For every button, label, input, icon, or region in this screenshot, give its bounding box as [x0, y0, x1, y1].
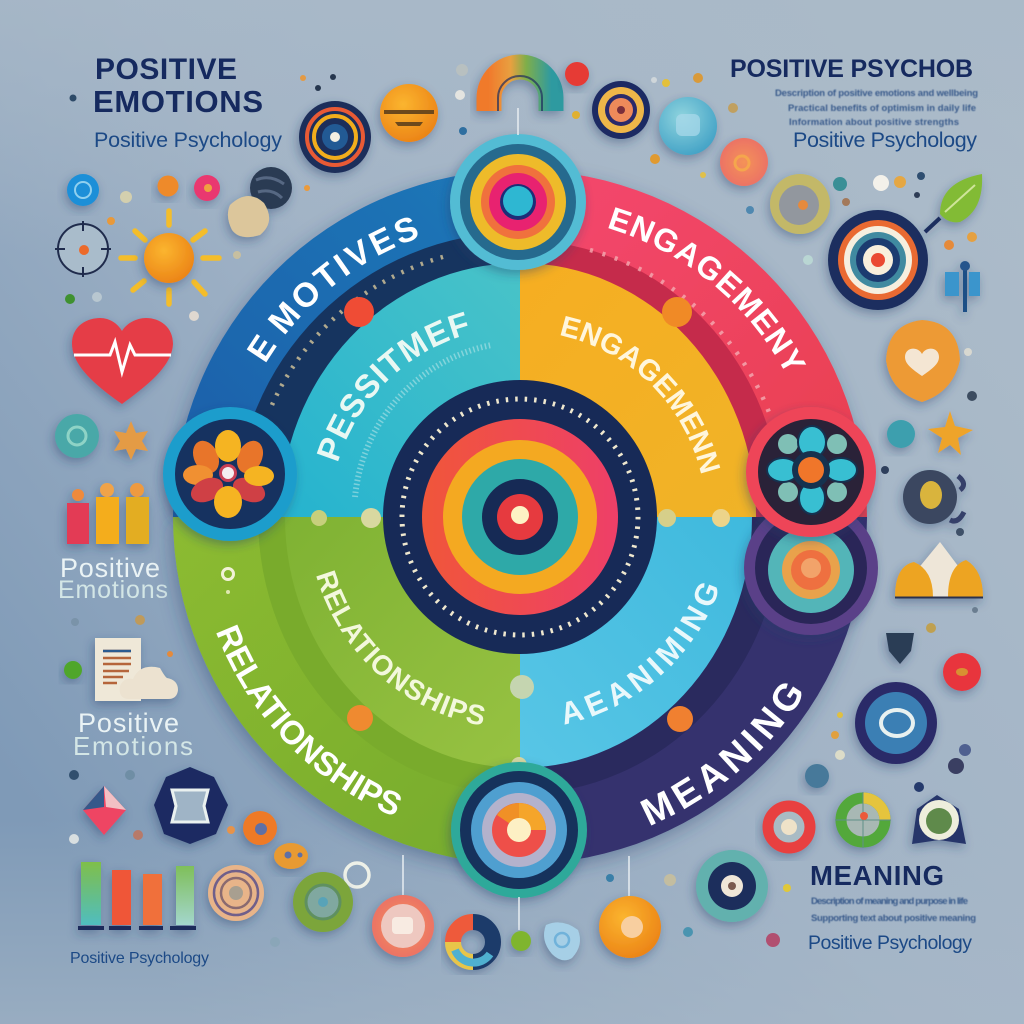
node: engagement flower: [746, 407, 876, 537]
label: positive emotions upper: Positive: [60, 553, 160, 583]
icon: orange blob: [274, 843, 308, 869]
label: positive emotions lower: [73, 708, 193, 761]
panel: relationships quadrant: [285, 517, 520, 768]
icon: heart: [72, 318, 173, 404]
icon: red rounded: [943, 653, 981, 691]
icon: navy blue disc: [855, 682, 937, 764]
label: positive emotions upper: [58, 553, 168, 604]
panel: emotives outer ring: [173, 170, 520, 517]
icon: dark ring: [903, 470, 964, 524]
main wheel: [140, 172, 908, 890]
icon: red ball: [372, 895, 434, 957]
text: pessitmef: PESSITMEF: [316, 312, 468, 462]
heading: meaning: [808, 860, 976, 954]
icon: pie ring: [453, 922, 493, 963]
tick arc under pessitmef: [355, 345, 492, 497]
icon: rainbow: [489, 67, 551, 111]
icon: red segmented ring: [768, 806, 810, 848]
heading: positive psychology: [730, 55, 978, 152]
heading: positive psychology: Description of positive emotions and wellbeing: [775, 88, 978, 99]
icon: orange dot: [158, 176, 178, 196]
panel: meaning outer ring: [520, 517, 867, 864]
panel: meaning quadrant: [520, 517, 752, 768]
icon: orange ball bottom: [599, 896, 661, 958]
icon: white ring: [345, 863, 369, 887]
dotted arc on dark band: [272, 255, 450, 405]
icon: diamond: [83, 786, 126, 835]
icon: green dot: [511, 931, 531, 951]
dotted arc on red band: [590, 250, 770, 415]
label: positive emotions lower: Emotions: [73, 731, 193, 761]
icon: steel dot: [805, 764, 829, 788]
connector lines: [403, 108, 629, 930]
icon: leaf: [925, 174, 982, 232]
heading: positive psychology: Information about positive strengths: [789, 117, 959, 128]
panel: relationships outer ring: [173, 517, 520, 864]
label: positive psychology lower left: Positive Psychology: [70, 950, 209, 967]
icon: document with cloud: [95, 638, 178, 701]
icon: gold star: [928, 411, 973, 455]
icon: small shield: [886, 633, 914, 664]
label: positive emotions upper: Emotions: [58, 576, 168, 604]
node: emotions flower: [163, 407, 297, 541]
icon: teal target: [696, 850, 768, 922]
icon: pink dot: [194, 175, 220, 201]
heading: positive psychology: POSITIVE PSYCHOB: [730, 55, 973, 83]
heading: positive emotions: Positive Psychology: [94, 128, 282, 152]
icon: mountains and house: [895, 542, 983, 598]
icon: teal chip: [887, 420, 915, 448]
small scattered details: [65, 64, 978, 947]
dark band: meaning: [520, 517, 782, 794]
heading: positive emotions: EMOTIONS: [93, 84, 263, 119]
text: engagemenn: ENGAGEMENN: [560, 316, 720, 474]
heading: positive emotions: POSITIVE: [95, 53, 237, 86]
text: engagement: ENGAGEMENY: [608, 207, 806, 369]
heading: positive psychology: Practical benefits of optimism in daily life: [788, 103, 976, 114]
central target: [383, 380, 657, 654]
icon: coral ball: [720, 138, 768, 186]
icon: light blue shield: [544, 922, 580, 960]
heading: meaning: MEANING: [810, 860, 944, 891]
node: purple right: [744, 501, 878, 635]
icon: blue figure: [945, 261, 980, 312]
icon: large target: [828, 210, 928, 310]
text: meaning: MEANING: [640, 683, 802, 826]
icon: beige rock: [228, 196, 269, 237]
icon: orange heart badge: [886, 320, 960, 402]
dark band: emotives: [235, 232, 520, 517]
icon: dark star target: [912, 795, 966, 844]
label: positive emotions lower: Positive: [78, 708, 179, 738]
bar chart: [78, 862, 196, 928]
icon: green blob: [64, 661, 82, 679]
icon: dark blob: [250, 167, 292, 209]
heading: meaning: Description of meaning and purpose in life: [811, 896, 968, 907]
icon: teal ball: [659, 97, 717, 155]
dark band: relationships: [258, 517, 520, 794]
icon: orange cluster: [114, 421, 148, 460]
text: relationships inner: RELATIONSHIPS: [316, 570, 484, 724]
text: aeaniming: AEANIMING: [564, 583, 718, 725]
node: top rainbow target: [450, 134, 586, 270]
panel: engagement outer ring: [520, 170, 867, 517]
icon: orange ring: [243, 811, 277, 845]
icon: spiral disc: [208, 865, 264, 921]
text: emotives: EMOTIVES: [246, 218, 418, 362]
panel: engagement quadrant: [520, 263, 756, 517]
icon: navy octagon: [154, 767, 228, 844]
heading: meaning: Supporting text about positive meaning: [811, 913, 976, 924]
node dots on wheel: [311, 297, 730, 773]
icon: crosshair: [55, 221, 111, 277]
icon: teal circle: [55, 414, 99, 458]
icon: sun: [121, 211, 219, 304]
icon: top target dark: [299, 101, 371, 173]
icon: green ball: [293, 872, 353, 932]
icon: orange ball: [380, 84, 438, 142]
node: bottom target: [451, 762, 587, 898]
icon: green ring: [835, 792, 891, 848]
icon: blue spiral: [67, 174, 99, 206]
icon: ring ball: [770, 174, 830, 234]
icon: navy target: [592, 81, 650, 139]
icon: small red ball: [565, 62, 589, 86]
icon: people bars: [67, 483, 149, 544]
panel: positive quadrant: [280, 263, 520, 517]
heading: positive psychology: Positive Psychology: [793, 128, 977, 152]
dark band: engagement: [520, 240, 782, 517]
heading: positive emotions: [93, 53, 282, 152]
text: relationships: RELATIONSHIPS: [216, 624, 401, 814]
pin on relationships ring: [222, 568, 234, 594]
heading: meaning: Positive Psychology: [808, 932, 972, 954]
